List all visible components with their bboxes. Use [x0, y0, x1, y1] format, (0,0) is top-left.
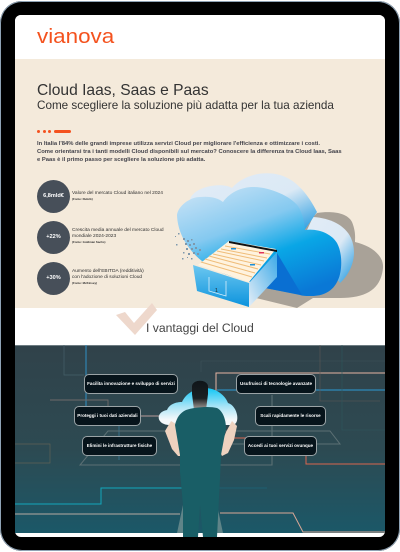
label: Facilita innovazione: Facilita innovazione e sviluppo di servizi	[87, 381, 175, 386]
intro text: e Paas è il primo passo per scegliere la soluzione più adatta.	[37, 157, 205, 163]
heading: I vantaggi del Cloud: I vantaggi del Cloud	[146, 321, 254, 335]
stat: growth: +22%	[46, 234, 61, 240]
cloud	[159, 388, 237, 425]
accent dots and dash	[37, 130, 71, 133]
intro text: In Italia l'84% delle grandi imprese utilizza servizi Cloud per migliorare l'efficienza e ottimizzare i costi.	[37, 141, 320, 147]
right lobe back	[307, 217, 354, 283]
label: Usufruisci tecnologie: Usufruisci di tecnologie avanzate	[240, 381, 312, 386]
illustration: cloud with file drawer	[175, 173, 383, 308]
label: Usufruisci tecnologie	[236, 374, 316, 394]
stat: EBITDA: +30%	[46, 275, 61, 281]
label: Accedi servizi	[244, 436, 317, 456]
file drawer	[193, 241, 277, 307]
logo: vianova: vianova	[37, 26, 114, 48]
stat: EBITDA	[37, 262, 144, 295]
label: Protegge i dati	[74, 406, 141, 426]
intro text: Come orientarsi tra i tanti modelli Cloud disponibili sul mercato? Conoscere la differenza tra Cloud Iaas, Saas	[37, 149, 342, 155]
label: Accedi servizi: Accedi ai tuoi servizi ovunque	[248, 443, 313, 448]
watermark check	[116, 303, 157, 335]
label: Elimina infrastrutture: Elimini le infrastrutture fisiche	[87, 443, 152, 448]
body	[175, 407, 226, 537]
right arm skin	[219, 421, 237, 456]
stat: market value: (Fonte: Rubrik)	[72, 197, 93, 201]
cloud front face	[177, 187, 341, 296]
panel: intro background	[15, 59, 385, 308]
stat: market value: 6,8mld€	[43, 193, 64, 199]
stat: growth: (Fonte: Goldman Sachs)	[72, 240, 105, 244]
stat: market value: Valore del mercato Cloud italiano nel 2024	[72, 191, 163, 196]
coat tails	[177, 505, 223, 533]
stat: EBITDA: (Fonte: McKinsey)	[72, 281, 97, 285]
label: Scali risorse	[255, 406, 326, 426]
head	[192, 381, 208, 410]
stat: growth: mondiale 2024-2023	[72, 234, 116, 239]
data particles	[175, 233, 201, 260]
stat: growth: Crescita media annuale del mercato Cloud	[72, 228, 164, 233]
label: Protegge i dati: Proteggi i tuoi dati aziendali	[77, 413, 138, 418]
left arm skin	[165, 421, 184, 456]
circuit lines	[15, 345, 385, 532]
label: Elimina infrastrutture	[82, 436, 157, 456]
title: Cloud Iaas, Saas e Paas	[37, 82, 209, 99]
stat: growth	[37, 221, 164, 254]
cloud underside wedge	[258, 253, 302, 295]
subtitle: Come scegliere la soluzione più adatta per la tua azienda	[37, 99, 334, 112]
stat: EBITDA: con l'adozione di soluzioni Cloud	[72, 275, 142, 280]
panel: benefits background	[15, 345, 385, 533]
cloud shadow	[256, 212, 383, 308]
header band	[15, 15, 385, 59]
file drawer: 1	[215, 288, 218, 294]
cloud back extrusion	[190, 173, 317, 231]
stat: market value	[37, 180, 163, 213]
label: Scali risorse: Scali rapidamente le risorse	[260, 413, 321, 418]
label: Facilita innovazione	[84, 374, 178, 394]
intro text	[37, 141, 342, 163]
stat: EBITDA: Aumento dell'EBITDA (redditività)	[72, 269, 144, 274]
